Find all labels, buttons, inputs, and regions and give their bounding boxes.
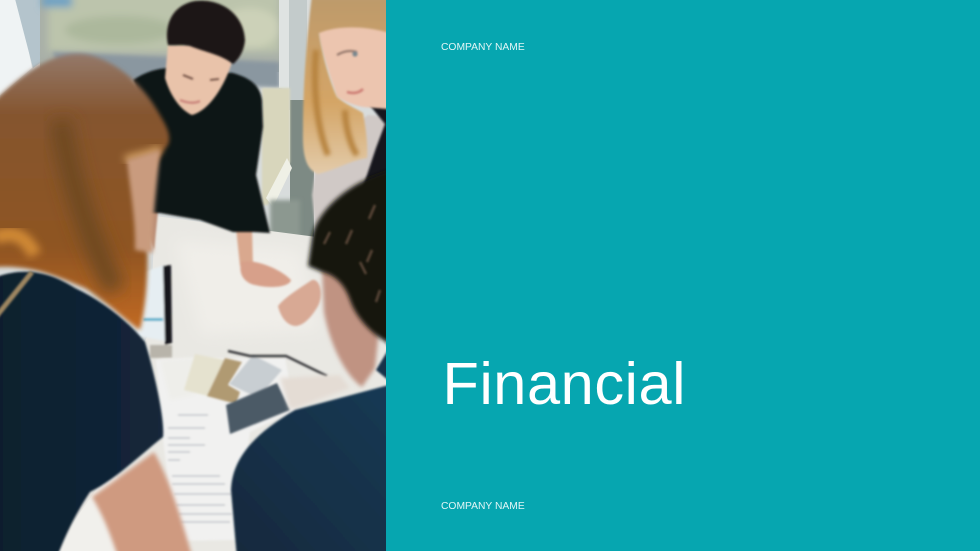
photo print xyxy=(226,383,290,434)
curly dark hair xyxy=(308,168,400,350)
navy shirt xyxy=(231,382,400,551)
cheek xyxy=(127,150,160,253)
person: blonde woman xyxy=(303,0,400,235)
short black hair xyxy=(167,1,245,64)
hand on table xyxy=(278,280,321,326)
brown card xyxy=(207,358,242,404)
notebook xyxy=(184,354,225,396)
person: woman in black shirt xyxy=(133,1,291,287)
person: foreground right xyxy=(231,168,400,551)
bottom company label: COMPANY NAME xyxy=(441,501,525,512)
blonde hair xyxy=(303,0,400,174)
shoulder strap xyxy=(0,272,32,318)
heading: Financial xyxy=(442,350,686,417)
tablet xyxy=(135,265,172,358)
arm and hand xyxy=(145,210,291,287)
room background xyxy=(0,0,386,551)
face xyxy=(165,45,232,115)
grey card xyxy=(229,355,282,398)
papers and samples on the table xyxy=(156,351,350,541)
person: foreground left xyxy=(0,54,196,551)
navy t-shirt xyxy=(0,272,163,551)
black shirt xyxy=(133,68,270,233)
bare arm xyxy=(92,452,196,551)
black garment xyxy=(362,95,400,190)
hair xyxy=(0,54,169,330)
top company label: COMPANY NAME xyxy=(441,42,525,53)
glasses xyxy=(228,351,327,376)
face xyxy=(318,24,400,110)
photo: team around a table xyxy=(0,0,386,551)
neck and face xyxy=(322,268,378,387)
handwritten lines xyxy=(168,415,232,522)
light top xyxy=(312,115,400,235)
table xyxy=(40,216,400,551)
